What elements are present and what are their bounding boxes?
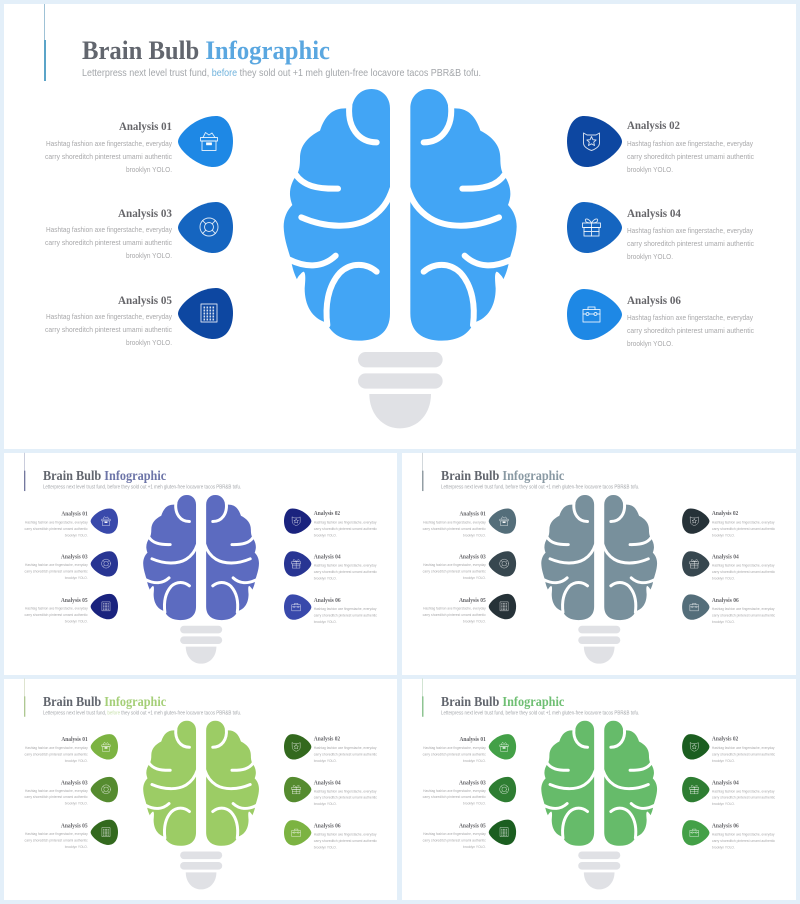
item: Analysis 05: Analysis 05 — [61, 598, 88, 604]
item: Analysis 01 — [423, 508, 516, 537]
item: Analysis 05 — [45, 288, 233, 347]
subtitle: Letterpress next level trust fund, before they sold out +1 meh gluten-free locavore tacos PBR&B tofu. — [441, 710, 639, 716]
item: Analysis 05: carry shoreditch pinterest umami authentic — [423, 613, 486, 617]
item: Analysis 02: brooklyn YOLO. — [314, 533, 337, 537]
item: Analysis 03: Analysis 03 — [118, 206, 172, 220]
item: Analysis 02: brooklyn YOLO. — [712, 759, 735, 763]
panel: indigo slide — [4, 453, 397, 675]
item: Analysis 02: carry shoreditch pinterest umami authentic — [314, 527, 377, 531]
item: Analysis 02: brooklyn YOLO. — [712, 533, 735, 537]
item: Analysis 02 — [682, 508, 775, 537]
item: Analysis 06: carry shoreditch pinterest umami authentic — [712, 839, 775, 843]
item: Analysis 04: carry shoreditch pinterest umami authentic — [314, 796, 377, 800]
item: Analysis 06: brooklyn YOLO. — [314, 845, 337, 849]
item: Analysis 06: Analysis 06 — [314, 598, 341, 604]
item: Analysis 04: carry shoreditch pinterest umami authentic — [712, 796, 775, 800]
item: Analysis 05: Analysis 05 — [459, 824, 486, 830]
subtitle: Letterpress next level trust fund, before they sold out +1 meh gluten-free locavore tacos PBR&B tofu. — [82, 67, 481, 79]
item: Analysis 04: brooklyn YOLO. — [712, 802, 735, 806]
item: Analysis 03: carry shoreditch pinterest umami authentic — [423, 795, 486, 799]
item: Analysis 04 — [682, 777, 775, 806]
item: Analysis 05: Hashtag fashion axe fingerstache, everyday — [25, 832, 88, 836]
item: Analysis 02: Analysis 02 — [627, 118, 680, 132]
subtitle: Letterpress next level trust fund, before they sold out +1 meh gluten-free locavore tacos PBR&B tofu. — [441, 485, 639, 491]
brain bulb illustration — [541, 495, 657, 664]
item: Analysis 03: Hashtag fashion axe fingerstache, everyday — [25, 563, 88, 567]
item: Analysis 01: Hashtag fashion axe fingerstache, everyday — [46, 139, 172, 148]
panel: lime slide — [4, 678, 397, 900]
item: Analysis 04: Analysis 04 — [314, 780, 341, 786]
item: Analysis 02: brooklyn YOLO. — [627, 165, 673, 174]
item: Analysis 01: Hashtag fashion axe fingerstache, everyday — [25, 520, 88, 524]
item: Analysis 03: Hashtag fashion axe fingerstache, everyday — [46, 225, 172, 234]
item: Analysis 01: brooklyn YOLO. — [65, 533, 88, 537]
item: Analysis 01: Analysis 01 — [61, 737, 88, 743]
item: Analysis 02: Analysis 02 — [712, 511, 738, 517]
item: Analysis 01: Hashtag fashion axe fingerstache, everyday — [423, 520, 486, 524]
item: Analysis 02: carry shoreditch pinterest umami authentic — [314, 753, 377, 757]
accent rule — [24, 453, 25, 491]
item: Analysis 05: Hashtag fashion axe fingerstache, everyday — [423, 832, 486, 836]
item: Analysis 04: Hashtag fashion axe fingerstache, everyday — [712, 564, 775, 568]
item: Analysis 01 — [423, 734, 516, 763]
item: Analysis 02: Hashtag fashion axe fingerstache, everyday — [627, 139, 753, 148]
item: Analysis 02: brooklyn YOLO. — [314, 759, 337, 763]
item: Analysis 03 — [25, 777, 118, 806]
item: Analysis 01: Hashtag fashion axe fingerstache, everyday — [423, 746, 486, 750]
item: Analysis 03: Hashtag fashion axe fingerstache, everyday — [423, 563, 486, 567]
item: Analysis 06 — [682, 594, 775, 624]
item: Analysis 05: Analysis 05 — [459, 598, 486, 604]
item: Analysis 01: carry shoreditch pinterest umami authentic — [45, 152, 172, 161]
item: Analysis 01: carry shoreditch pinterest umami authentic — [25, 527, 88, 531]
item: Analysis 01 — [45, 116, 233, 174]
item: Analysis 03: carry shoreditch pinterest umami authentic — [25, 570, 88, 574]
item: Analysis 02 — [284, 508, 377, 537]
item: Analysis 04 — [284, 777, 377, 806]
item: Analysis 03 — [25, 551, 118, 580]
item: Analysis 06: Analysis 06 — [314, 824, 341, 830]
item: Analysis 06: brooklyn YOLO. — [712, 845, 735, 849]
item: Analysis 04 — [284, 551, 377, 581]
brain bulb illustration — [541, 721, 657, 889]
item: Analysis 04: brooklyn YOLO. — [314, 577, 337, 581]
item: Analysis 05 — [25, 594, 118, 623]
item: Analysis 01 — [25, 734, 118, 763]
item: Analysis 01 — [25, 508, 118, 537]
item: Analysis 05: carry shoreditch pinterest umami authentic — [45, 325, 172, 334]
item: Analysis 05 — [25, 820, 118, 849]
item: Analysis 03: carry shoreditch pinterest umami authentic — [25, 795, 88, 799]
title: Brain Bulb Infographic — [43, 468, 166, 483]
item: Analysis 05: carry shoreditch pinterest umami authentic — [25, 839, 88, 843]
item: Analysis 05: brooklyn YOLO. — [65, 619, 88, 623]
item: Analysis 01: brooklyn YOLO. — [65, 759, 88, 763]
item: Analysis 05: carry shoreditch pinterest umami authentic — [25, 613, 88, 617]
item: Analysis 01: carry shoreditch pinterest umami authentic — [423, 527, 486, 531]
item: Analysis 05: Hashtag fashion axe fingerstache, everyday — [46, 312, 172, 321]
item: Analysis 02 — [284, 734, 377, 763]
item: Analysis 04: brooklyn YOLO. — [712, 577, 735, 581]
item: Analysis 05: Hashtag fashion axe fingerstache, everyday — [423, 606, 486, 610]
item: Analysis 03 — [423, 777, 516, 806]
item: Analysis 02: Analysis 02 — [314, 511, 340, 517]
item: Analysis 06 — [284, 594, 377, 624]
title: Brain Bulb Infographic — [82, 35, 330, 65]
item: Analysis 06: brooklyn YOLO. — [627, 339, 673, 348]
item: Analysis 03: Analysis 03 — [459, 780, 486, 786]
item: Analysis 06 — [284, 820, 377, 849]
item: Analysis 03: brooklyn YOLO. — [463, 802, 486, 806]
item: Analysis 03: Analysis 03 — [61, 555, 88, 561]
title: Brain Bulb Infographic — [441, 694, 564, 709]
item: Analysis 03: brooklyn YOLO. — [65, 802, 88, 806]
item: Analysis 03: carry shoreditch pinterest umami authentic — [45, 238, 172, 247]
item: Analysis 04: Hashtag fashion axe fingerstache, everyday — [314, 789, 377, 793]
item: Analysis 03: Hashtag fashion axe fingerstache, everyday — [25, 789, 88, 793]
item: Analysis 06: Hashtag fashion axe fingerstache, everyday — [712, 607, 775, 611]
item: Analysis 04: Hashtag fashion axe fingerstache, everyday — [314, 564, 377, 568]
subtitle: Letterpress next level trust fund, before they sold out +1 meh gluten-free locavore tacos PBR&B tofu. — [43, 485, 241, 491]
item: Analysis 06: Hashtag fashion axe fingerstache, everyday — [314, 833, 377, 837]
item: Analysis 02: carry shoreditch pinterest umami authentic — [712, 527, 775, 531]
item: Analysis 05: brooklyn YOLO. — [126, 338, 172, 347]
item: Analysis 02: carry shoreditch pinterest umami authentic — [627, 152, 754, 161]
title: Brain Bulb Infographic — [43, 694, 166, 709]
item: Analysis 06: carry shoreditch pinterest umami authentic — [314, 613, 377, 617]
item: Analysis 06: Hashtag fashion axe fingerstache, everyday — [627, 313, 753, 322]
item: Analysis 01: Analysis 01 — [459, 511, 486, 517]
item: Analysis 02 — [567, 116, 754, 174]
item: Analysis 06: carry shoreditch pinterest umami authentic — [712, 613, 775, 617]
item: Analysis 01: Hashtag fashion axe fingerstache, everyday — [25, 746, 88, 750]
item: Analysis 04 — [682, 551, 775, 581]
item: Analysis 02: Analysis 02 — [314, 737, 340, 743]
item: Analysis 01: Analysis 01 — [61, 511, 88, 517]
item: Analysis 03: brooklyn YOLO. — [463, 576, 486, 580]
item: Analysis 04: carry shoreditch pinterest umami authentic — [627, 239, 754, 248]
accent rule — [422, 678, 423, 717]
item: Analysis 04 — [567, 202, 754, 261]
item: Analysis 05: Hashtag fashion axe fingerstache, everyday — [25, 606, 88, 610]
item: Analysis 06: carry shoreditch pinterest umami authentic — [627, 326, 754, 335]
accent rule — [44, 4, 46, 81]
item: Analysis 01: carry shoreditch pinterest umami authentic — [25, 753, 88, 757]
item: Analysis 02: Analysis 02 — [712, 737, 738, 743]
item: Analysis 05: Analysis 05 — [118, 293, 172, 307]
item: Analysis 04: Hashtag fashion axe fingerstache, everyday — [627, 226, 753, 235]
item: Analysis 05: carry shoreditch pinterest umami authentic — [423, 839, 486, 843]
item: Analysis 03: Hashtag fashion axe fingerstache, everyday — [423, 789, 486, 793]
item: Analysis 03 — [423, 551, 516, 580]
item: Analysis 01: Analysis 01 — [459, 737, 486, 743]
item: Analysis 01: carry shoreditch pinterest umami authentic — [423, 753, 486, 757]
accent rule — [422, 453, 423, 491]
item: Analysis 01: Analysis 01 — [119, 119, 172, 133]
item: Analysis 01: brooklyn YOLO. — [126, 165, 172, 174]
title: Brain Bulb Infographic — [441, 468, 564, 483]
item: Analysis 02: carry shoreditch pinterest umami authentic — [712, 753, 775, 757]
item: Analysis 05: brooklyn YOLO. — [463, 619, 486, 623]
item: Analysis 02: Hashtag fashion axe fingerstache, everyday — [314, 746, 377, 750]
brain bulb illustration — [143, 495, 259, 664]
item: Analysis 06: brooklyn YOLO. — [314, 620, 337, 624]
panel: slate slide — [402, 453, 796, 675]
panel: green slide — [402, 678, 796, 900]
item: Analysis 04: brooklyn YOLO. — [627, 252, 673, 261]
subtitle: Letterpress next level trust fund, before they sold out +1 meh gluten-free locavore tacos PBR&B tofu. — [43, 710, 241, 716]
item: Analysis 03 — [45, 202, 233, 260]
item: Analysis 01: brooklyn YOLO. — [463, 533, 486, 537]
item: Analysis 04: carry shoreditch pinterest umami authentic — [712, 570, 775, 574]
item: Analysis 01: brooklyn YOLO. — [463, 759, 486, 763]
item: Analysis 02: Hashtag fashion axe fingerstache, everyday — [712, 746, 775, 750]
item: Analysis 06: brooklyn YOLO. — [712, 620, 735, 624]
item: Analysis 04: Analysis 04 — [712, 555, 739, 561]
item: Analysis 06: Hashtag fashion axe fingerstache, everyday — [314, 607, 377, 611]
item: Analysis 02: Hashtag fashion axe fingerstache, everyday — [712, 520, 775, 524]
item: Analysis 04: carry shoreditch pinterest umami authentic — [314, 570, 377, 574]
item: Analysis 05 — [423, 594, 516, 623]
item: Analysis 06 — [567, 289, 754, 348]
item: Analysis 04: Analysis 04 — [314, 555, 341, 561]
item: Analysis 03: Analysis 03 — [61, 780, 88, 786]
brain bulb illustration — [284, 89, 517, 428]
item: Analysis 06: Hashtag fashion axe fingerstache, everyday — [712, 833, 775, 837]
item: Analysis 03: carry shoreditch pinterest umami authentic — [423, 570, 486, 574]
item: Analysis 06: carry shoreditch pinterest umami authentic — [314, 839, 377, 843]
item: Analysis 04: brooklyn YOLO. — [314, 802, 337, 806]
panel: blue main slide — [4, 4, 796, 449]
item: Analysis 05: brooklyn YOLO. — [463, 845, 486, 849]
item: Analysis 06: Analysis 06 — [627, 293, 681, 307]
item: Analysis 03: Analysis 03 — [459, 555, 486, 561]
item: Analysis 05: Analysis 05 — [61, 824, 88, 830]
item: Analysis 04: Hashtag fashion axe fingerstache, everyday — [712, 789, 775, 793]
item: Analysis 04: Analysis 04 — [712, 780, 739, 786]
item: Analysis 04: Analysis 04 — [627, 206, 681, 220]
item: Analysis 05 — [423, 820, 516, 849]
item: Analysis 03: brooklyn YOLO. — [65, 576, 88, 580]
brain bulb illustration — [143, 721, 259, 889]
item: Analysis 02 — [682, 734, 775, 763]
item: Analysis 06: Analysis 06 — [712, 824, 739, 830]
item: Analysis 06 — [682, 820, 775, 849]
accent rule — [24, 678, 25, 717]
item: Analysis 03: brooklyn YOLO. — [126, 251, 172, 260]
item: Analysis 06: Analysis 06 — [712, 598, 739, 604]
item: Analysis 02: Hashtag fashion axe fingerstache, everyday — [314, 520, 377, 524]
item: Analysis 05: brooklyn YOLO. — [65, 845, 88, 849]
